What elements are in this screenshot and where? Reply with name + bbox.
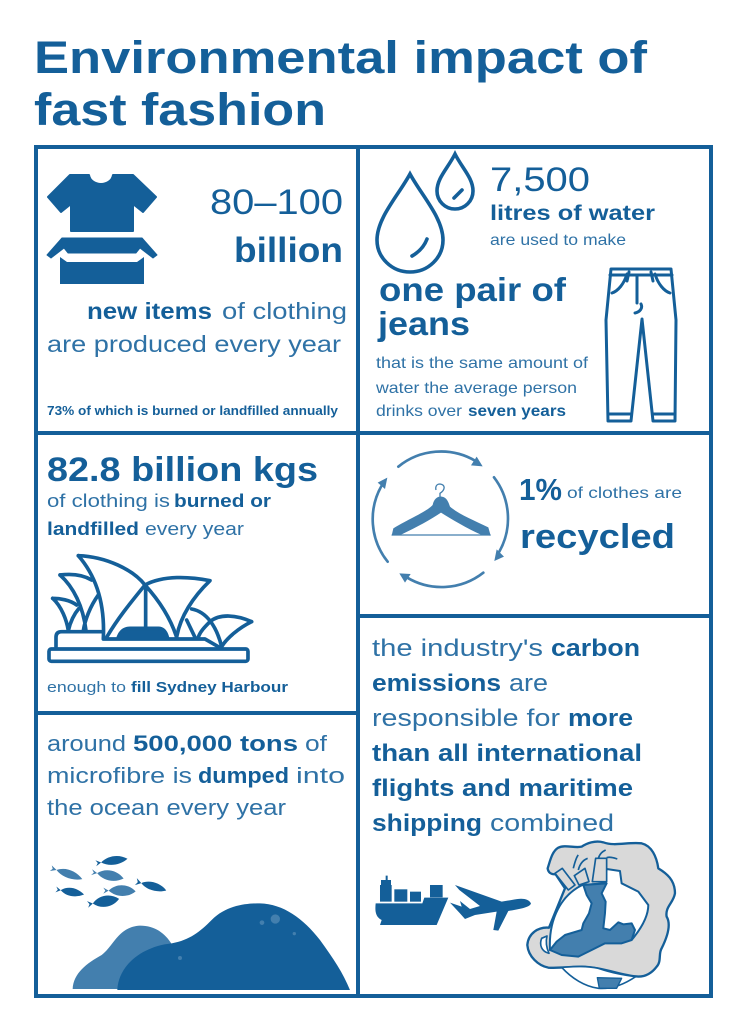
text: same amount of water: drinks over [376,403,463,420]
text: new items of clothing [47,298,347,357]
text: microfibre dumped: the ocean every year [47,795,286,820]
statistic: 7,500 litres of water: 7,500 [490,161,590,199]
illustration: large rock [117,903,350,990]
text: carbon emissions comparison: combined [490,810,614,837]
text: same amount of water: that is the same amount of [376,355,589,372]
text: enough to fill Sydney Harbour: fill Sydney Harbour [131,679,288,696]
heading: one pair of jeans [377,271,567,342]
text: microfibre dumped: into [296,763,345,788]
text: carbon emissions comparison: emissions [372,670,501,697]
icon: Sydney Opera House [49,556,252,661]
text: burned or landfilled: landfilled [47,519,139,539]
icon: school of fish [50,854,167,910]
text: same amount of water [375,355,589,420]
text: microfibre dumped: of [305,731,328,756]
illustration: bubbles [178,914,296,960]
panel: clothing burned or landfilled [36,433,358,713]
text: microfibre dumped [47,731,345,820]
icons: ship, plane and polluted globe [375,842,675,988]
text: carbon emissions comparison: the industry's [372,635,543,662]
panel: clothing production [36,147,358,433]
icon: jeans [606,269,676,421]
illustration: small rock [73,926,172,989]
illustration: fish and seabed [50,854,350,990]
text: carbon emissions comparison: more [568,705,633,732]
title: Environmental impact of [34,32,648,83]
text: carbon emissions comparison [372,635,642,837]
text: carbon emissions comparison: are [509,670,548,697]
text: same amount of water: water the average person [375,380,577,397]
text: carbon emissions comparison: flights and maritime [372,775,633,802]
icon: cargo ship [375,876,448,925]
title [34,32,648,135]
panel: carbon emissions [358,616,711,996]
statistic: 7,500 litres of water: are used to make [490,232,626,249]
text: burned or landfilled: every year [145,519,244,539]
text: enough to fill Sydney Harbour [47,679,288,696]
text: 1% of clothes are recycled [519,472,682,556]
icon: airplane [450,885,531,931]
icon: water drops [377,154,473,272]
heading: one pair of jeans: jeans [377,305,470,342]
text: microfibre dumped: 500,000 tons [133,731,298,756]
statistic: 80-100 billion [210,183,343,270]
text: carbon emissions comparison: carbon [551,635,640,662]
text: microfibre dumped: around [47,731,126,756]
statistic: 80-100 billion: 80–100 [210,183,343,222]
statistic: 7,500 litres of water: litres of water [490,202,655,225]
text: new items of clothing: new items [87,298,212,324]
statistic: 7,500 litres of water [490,161,655,249]
text: 1% of clothes are recycled: of clothes are [567,485,682,502]
text: 1% of clothes are recycled: 1% [519,472,562,507]
statistic: 80-100 billion: billion [234,231,343,270]
text: new items of clothing: of clothing [222,298,347,324]
text: carbon emissions comparison: than all international [372,740,642,767]
panel: microfibre in the ocean [36,713,358,996]
text: burned or landfilled share: 73% of which is burned or landfilled annually [47,403,339,418]
text: same amount of water: seven years [468,403,566,420]
statistic: 82.8 billion kgs: 82.8 billion kgs [47,451,318,489]
title: fast fashion [34,84,326,135]
icon: hanger in recycling arrows [373,452,508,587]
panel: recycled clothes [358,433,711,616]
text: microfibre dumped: dumped [198,763,289,788]
panel: water for jeans [358,147,711,433]
text: carbon emissions comparison: responsible for [372,705,560,732]
text: 1% of clothes are recycled: recycled [520,518,675,556]
text: burned or landfilled [47,491,271,539]
text: carbon emissions comparison: shipping [372,810,482,837]
text: microfibre dumped: microfibre is [47,763,192,788]
icon: t-shirt in box [47,175,157,284]
icon: globe in smog [527,842,675,988]
text: enough to fill Sydney Harbour: enough to [47,679,126,696]
heading: one pair of jeans: one pair of [379,271,567,308]
text: burned or landfilled: of clothing is [47,491,170,511]
text: burned or landfilled: burned or [174,491,271,511]
text: new items of clothing: are produced every year [47,331,341,357]
